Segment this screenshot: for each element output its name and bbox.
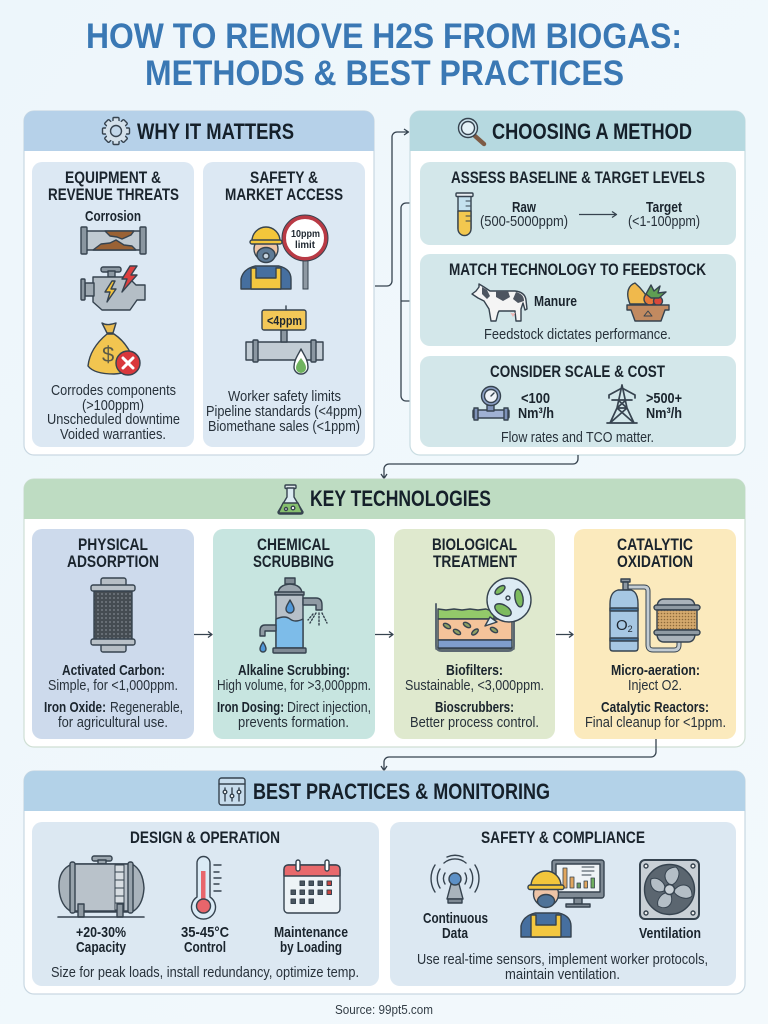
label: maintenance: by Loading [280, 939, 342, 956]
text block: Voided warranties. [60, 426, 166, 443]
icon: gear [102, 118, 130, 144]
icon: magnifier [458, 118, 484, 144]
panel: best practices and monitoring [24, 771, 745, 994]
card heading: SCRUBBING [253, 553, 334, 571]
text block: Corrodes components [51, 382, 176, 399]
text block: Direct injection, [287, 699, 371, 716]
icon: cow [472, 284, 527, 321]
text block: Simple, for <1,000ppm. [48, 677, 178, 694]
arrow: choosing a method to key technologies [381, 455, 578, 478]
card heading: ASSESS BASELINE & TARGET LEVELS [451, 169, 705, 187]
text block [47, 382, 180, 443]
card heading: DESIGN & OPERATION [130, 829, 280, 847]
label: raw [480, 199, 568, 230]
label: ventilation: Ventilation [639, 925, 701, 942]
label: high flow: Nm³/h [646, 405, 682, 422]
text block: Biomethane sales (<1ppm) [208, 418, 360, 435]
label: target [628, 199, 700, 230]
label: target: Target [646, 199, 682, 216]
label: high flow: >500+ [646, 390, 682, 407]
card: biological treatment [394, 529, 555, 739]
caption: maintain ventilation. [505, 966, 620, 983]
text block: Biofilters: [446, 662, 503, 679]
label: control [181, 924, 229, 956]
card heading: SAFETY & [250, 169, 318, 187]
text block: prevents formation. [238, 714, 349, 731]
text block: Activated Carbon: [62, 662, 165, 679]
text block: Regenerable, [110, 699, 183, 716]
arrow: key technologies to best practices [381, 739, 656, 770]
card heading: ADSORPTION [67, 553, 159, 571]
arrow: biological to catalytic [556, 632, 573, 638]
text block: Micro-aeration: [611, 662, 700, 679]
label: target: (<1-100ppm) [628, 213, 700, 230]
card: consider scale and cost [420, 356, 736, 447]
card: equipment and revenue threats [32, 162, 194, 447]
label: high flow [646, 390, 682, 422]
text block [585, 662, 726, 731]
label: O2: O [616, 617, 628, 634]
icon: gas storage tank [58, 856, 144, 917]
icon: oxygen cylinder and reactor [610, 579, 700, 651]
title: HOW TO REMOVE H2S FROM BIOGAS: [86, 17, 682, 56]
arrow: why it matters to choosing a method [375, 129, 408, 286]
heading: key technologies: KEY TECHNOLOGIES [310, 486, 491, 511]
text block: Inject O2. [628, 677, 682, 694]
heading: why it matters: WHY IT MATTERS [137, 119, 294, 144]
icon: worker with mask [521, 871, 571, 937]
title: METHODS & BEST PRACTICES [145, 54, 624, 93]
text block: High volume, for >3,000ppm. [217, 677, 371, 694]
card heading [225, 169, 343, 204]
title [86, 17, 682, 93]
text block [206, 388, 362, 435]
arrow: raw to target [579, 212, 616, 218]
text block: Iron Oxide: [44, 699, 106, 716]
card heading: REVENUE THREATS [48, 186, 179, 204]
text block: for agricultural use. [58, 714, 168, 731]
icon: corroded pipe [81, 227, 146, 254]
text block: Better process control. [410, 714, 539, 731]
icon: worker with limit sign [241, 215, 328, 289]
label: raw: (500-5000ppm) [480, 213, 568, 230]
label: control: 35-45°C [181, 924, 229, 941]
heading: choosing a method: CHOOSING A METHOD [492, 119, 692, 144]
card heading [48, 169, 179, 204]
card: safety and compliance [390, 822, 736, 986]
text block: Iron Dosing: [217, 699, 284, 716]
icon: worker with limit sign: 10ppm [291, 228, 320, 240]
card heading: BIOLOGICAL [432, 536, 517, 554]
card: safety and market access [203, 162, 365, 447]
card heading: SAFETY & COMPLIANCE [481, 829, 645, 847]
card heading: CHEMICAL [257, 536, 330, 554]
icon: monitor with chart [552, 860, 604, 907]
label: continuous data: Continuous [423, 910, 488, 927]
label: maintenance [274, 924, 348, 956]
label: continuous data: Data [442, 925, 469, 942]
icon: sensor signal [431, 855, 479, 903]
text block: (>100ppm) [82, 397, 144, 414]
card: physical adsorption [32, 529, 194, 739]
icon: flask [278, 485, 303, 514]
label: O2: 2 [628, 624, 633, 634]
card: catalytic oxidation [574, 529, 736, 739]
source line: Source: 99pt5.com [335, 1002, 433, 1017]
text block: Worker safety limits [228, 388, 341, 405]
text block [44, 662, 183, 731]
text block: Sustainable, <3,000ppm. [405, 677, 544, 694]
bracket: method steps [401, 203, 419, 401]
card heading: EQUIPMENT & [65, 169, 161, 187]
icon: flow meter [473, 386, 509, 420]
panel: key technologies [24, 479, 745, 747]
card heading: CONSIDER SCALE & COST [490, 363, 665, 381]
caption: Size for peak loads, install redundancy, optimize temp. [51, 964, 359, 981]
text block: Pipeline standards (<4ppm) [206, 403, 362, 420]
label: corrosion: Corrosion [85, 208, 141, 225]
arrow: chemical to biological [375, 632, 393, 638]
icon: money bag with cross [88, 323, 140, 375]
label: capacity: Capacity [76, 939, 127, 956]
text block: Unscheduled downtime [47, 411, 180, 428]
caption: Flow rates and TCO matter. [501, 429, 654, 446]
icon: carbon filter [91, 578, 135, 652]
icon: control sliders [219, 778, 245, 805]
icon: ventilation fan [640, 860, 699, 919]
caption: Feedstock dictates performance. [484, 326, 671, 343]
text block: Catalytic Reactors: [601, 699, 709, 716]
card heading: CATALYTIC [617, 536, 693, 554]
text block: Final cleanup for <1ppm. [585, 714, 726, 731]
text block: Bioscrubbers: [435, 699, 514, 716]
label: raw: Raw [512, 199, 536, 216]
icon: thermometer [192, 857, 221, 919]
card heading [253, 536, 334, 571]
label: control: Control [184, 939, 226, 956]
caption [417, 951, 708, 983]
icon: test tube [456, 193, 473, 236]
icon: calendar [284, 860, 340, 913]
card: design and operation [32, 822, 379, 986]
card heading: MARKET ACCESS [225, 186, 343, 204]
arrow: physical to chemical [194, 632, 212, 638]
text block: Alkaline Scrubbing: [238, 662, 350, 679]
label: low flow: Nm³/h [518, 405, 554, 422]
label: continuous data [423, 910, 488, 942]
card heading: MATCH TECHNOLOGY TO FEEDSTOCK [449, 261, 706, 279]
label: low flow [518, 390, 554, 422]
card heading [432, 536, 517, 571]
icon: worker with limit sign: limit [295, 239, 315, 251]
text block [217, 662, 371, 731]
caption: Use real-time sensors, implement worker protocols, [417, 951, 708, 968]
label: maintenance: Maintenance [274, 924, 348, 941]
card heading: TREATMENT [433, 553, 517, 571]
card: match technology [420, 254, 736, 346]
icon: organic waste basket [627, 283, 669, 321]
icon: money bag with cross: $ [102, 342, 114, 367]
card heading: PHYSICAL [78, 536, 148, 554]
icon: transmission tower [607, 385, 637, 423]
card: assess baseline [420, 162, 736, 245]
panel: choosing a method [410, 111, 745, 455]
label: manure: Manure [534, 293, 577, 310]
card heading [67, 536, 159, 571]
label: capacity [76, 924, 127, 956]
icon: damaged engine [81, 266, 145, 310]
icon: biofilter with microbes [436, 578, 531, 651]
heading: best practices and monitoring: BEST PRACTICES & MONITORING [253, 779, 550, 804]
icon: pipeline with 4ppm sign [246, 306, 323, 374]
label: low flow: <100 [521, 390, 550, 407]
label: capacity: +20-30% [76, 924, 126, 941]
icon: scrubber tower [260, 578, 327, 653]
text block [405, 662, 544, 731]
card heading [617, 536, 693, 571]
card: chemical scrubbing [213, 529, 375, 739]
icon: pipeline with 4ppm sign: <4ppm [267, 314, 302, 328]
card heading: OXIDATION [617, 553, 693, 571]
panel: why it matters [24, 111, 374, 455]
